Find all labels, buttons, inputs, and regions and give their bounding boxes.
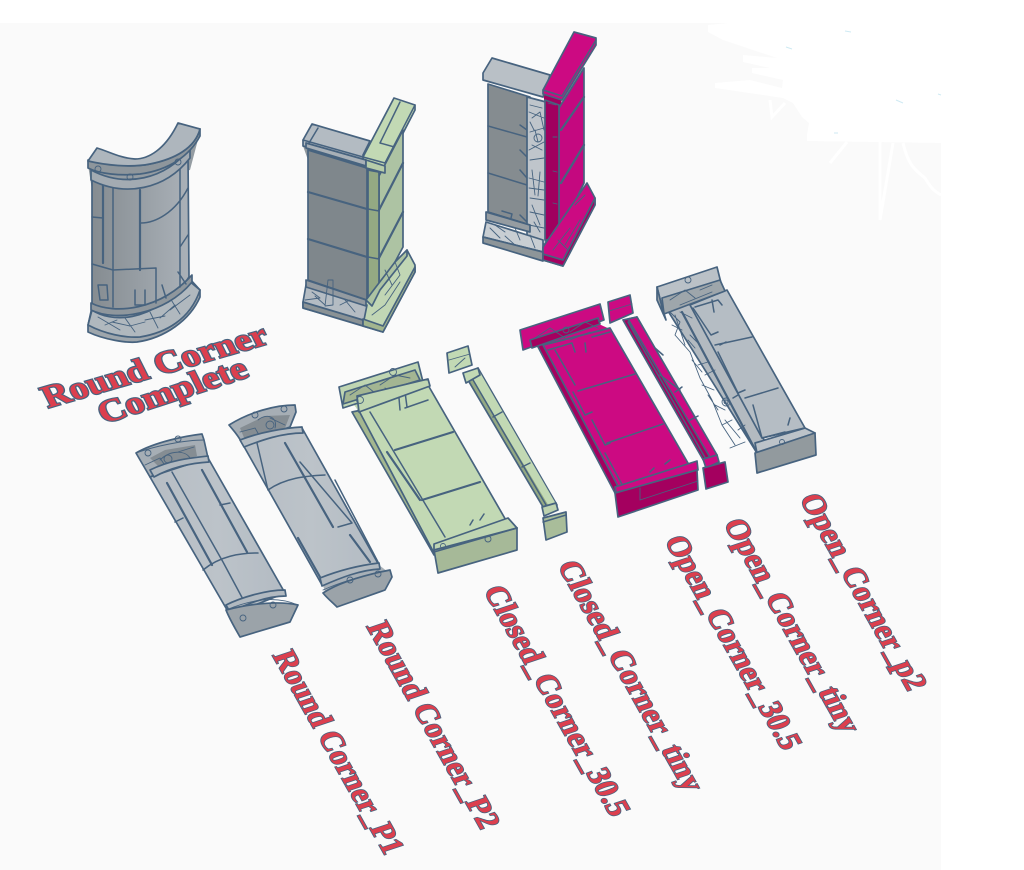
part: open corner 30.5 xyxy=(520,304,698,517)
label: open corner tiny: Open_Corner_tiny xyxy=(716,514,870,737)
model: open corner complete xyxy=(483,32,596,266)
label: open corner 30.5: Open_Corner_30.5 xyxy=(657,531,811,754)
part: open corner tiny xyxy=(608,295,728,489)
label: open corner p2: Open_Corner_p2 xyxy=(792,489,936,694)
erased white scribble xyxy=(708,23,941,220)
label: closed corner 30.5: Closed_Corner_30.5 xyxy=(476,581,639,820)
label: closed corner tiny: Closed_Corner_tiny xyxy=(550,556,713,795)
label: round corner p2: Round Corner_P2 xyxy=(359,617,509,833)
part: round corner p2 xyxy=(229,405,392,607)
part: closed corner tiny xyxy=(447,346,567,540)
part: round corner p1 xyxy=(136,434,298,637)
part: closed corner 30.5 xyxy=(339,362,517,573)
title: round corner complete: Round Corner xyxy=(35,318,274,415)
title: round corner complete: Complete xyxy=(91,351,254,431)
model: closed corner complete xyxy=(303,98,415,332)
label: round corner p1: Round Corner_P1 xyxy=(265,646,413,858)
model: round corner complete xyxy=(88,123,200,342)
part: open corner p2 xyxy=(657,267,816,473)
